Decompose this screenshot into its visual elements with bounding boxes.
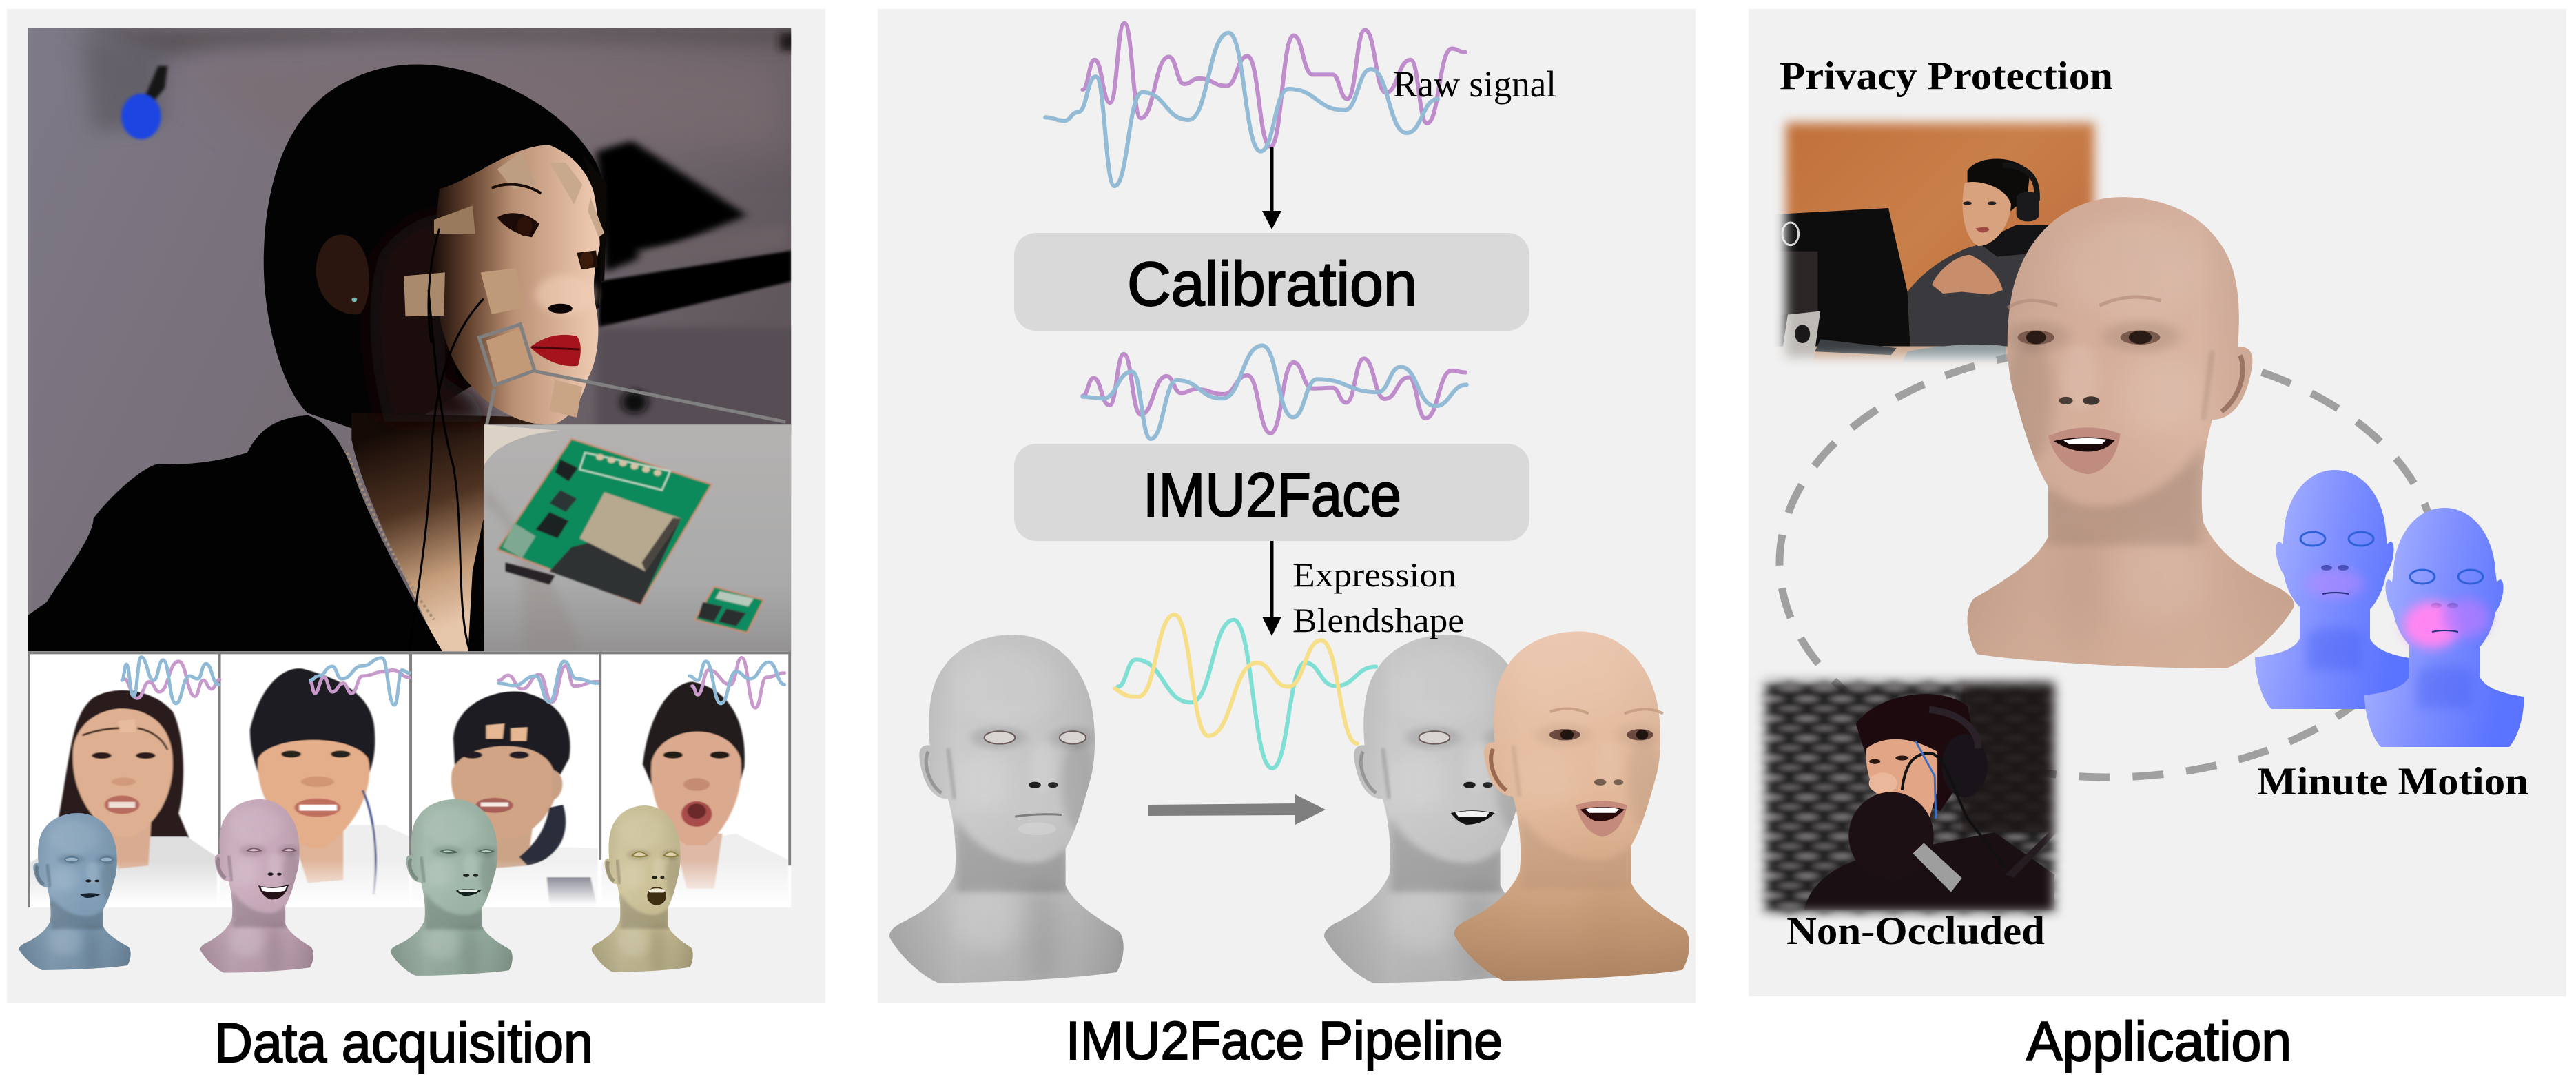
head: pink avatar (197, 797, 317, 975)
participant 1 (30, 690, 217, 907)
inset: sensor circuit board (484, 424, 791, 651)
label: privacy protection: Privacy Protection (1780, 54, 2113, 98)
facial sensor patches (404, 152, 604, 418)
head: large realistic avatar (1958, 189, 2302, 674)
photo: man at desk with sensors (1771, 109, 2109, 369)
block: IMU2Face (1014, 444, 1529, 541)
head: neutral gray mesh (883, 628, 1131, 987)
photo: man at microphone with sensors (1750, 668, 2071, 920)
participant 4 (601, 681, 788, 907)
hair (264, 65, 607, 440)
zoom callout lines and box (479, 325, 785, 427)
participant 2 (220, 668, 409, 907)
labels: expression blendshape (1292, 555, 1464, 639)
head: blue avatar (16, 810, 134, 972)
caption: application: Application (2026, 1011, 2291, 1073)
icon: blue camera light (121, 66, 167, 139)
label: raw signal: Raw signal (1393, 63, 1556, 105)
head: tan avatar (589, 803, 696, 974)
shadowed cheek and jaw (370, 211, 489, 422)
head: animated gray mesh (1318, 628, 1565, 987)
head: green avatar (387, 797, 516, 978)
neck and chest (351, 413, 555, 651)
arrow: raw signal to calibration (1262, 147, 1281, 229)
main PCB (497, 439, 712, 604)
photo: woman wearing facial IMU sensors (28, 28, 796, 651)
caption: data acquisition: Data acquisition (214, 1012, 593, 1074)
application dashed loop (1780, 347, 2437, 777)
panel: application background (1749, 9, 2566, 996)
arrow: IMU2Face to blendshape (1262, 541, 1281, 636)
calibrated signal waves (1082, 345, 1467, 439)
block: calibration: Calibration (1127, 250, 1417, 319)
head: photorealistic rendered avatar (1448, 626, 1696, 985)
block: calibration (1014, 233, 1529, 331)
label: non-occluded: Non-Occluded (1786, 910, 2045, 953)
strip bottom fade (28, 860, 791, 907)
block: IMU2Face: IMU2Face (1143, 461, 1401, 530)
participant 3 (412, 692, 598, 907)
small PCB (695, 586, 763, 633)
ear (316, 235, 369, 314)
heads: minute motion heatmap pair (2255, 470, 2524, 747)
label: minute motion: Minute Motion (2257, 760, 2528, 803)
arrow: gray transform arrow (1148, 794, 1326, 825)
blendshape waves (1115, 615, 1376, 768)
participant strip: four faces with signals (28, 651, 791, 907)
sensor wires (409, 229, 484, 651)
labels: expression blendshape: Blendshape (1292, 601, 1464, 639)
panel: pipeline background (878, 9, 1696, 1003)
labels: expression blendshape: Expression (1292, 555, 1456, 594)
front head with highlighted lips (2364, 508, 2524, 747)
strip frame (28, 651, 791, 907)
panel: data acquisition background (7, 9, 825, 1003)
pipeline top section: raw signal, arrow, blocks (1014, 23, 1556, 541)
eyes nose and lips (492, 185, 598, 366)
signal overlays on the four faces (122, 657, 785, 708)
raw signal waves (1045, 23, 1465, 186)
face (433, 145, 601, 424)
back head (2255, 470, 2414, 709)
black jacket (28, 415, 442, 651)
caption: IMU2Face pipeline: IMU2Face Pipeline (1066, 1010, 1503, 1071)
